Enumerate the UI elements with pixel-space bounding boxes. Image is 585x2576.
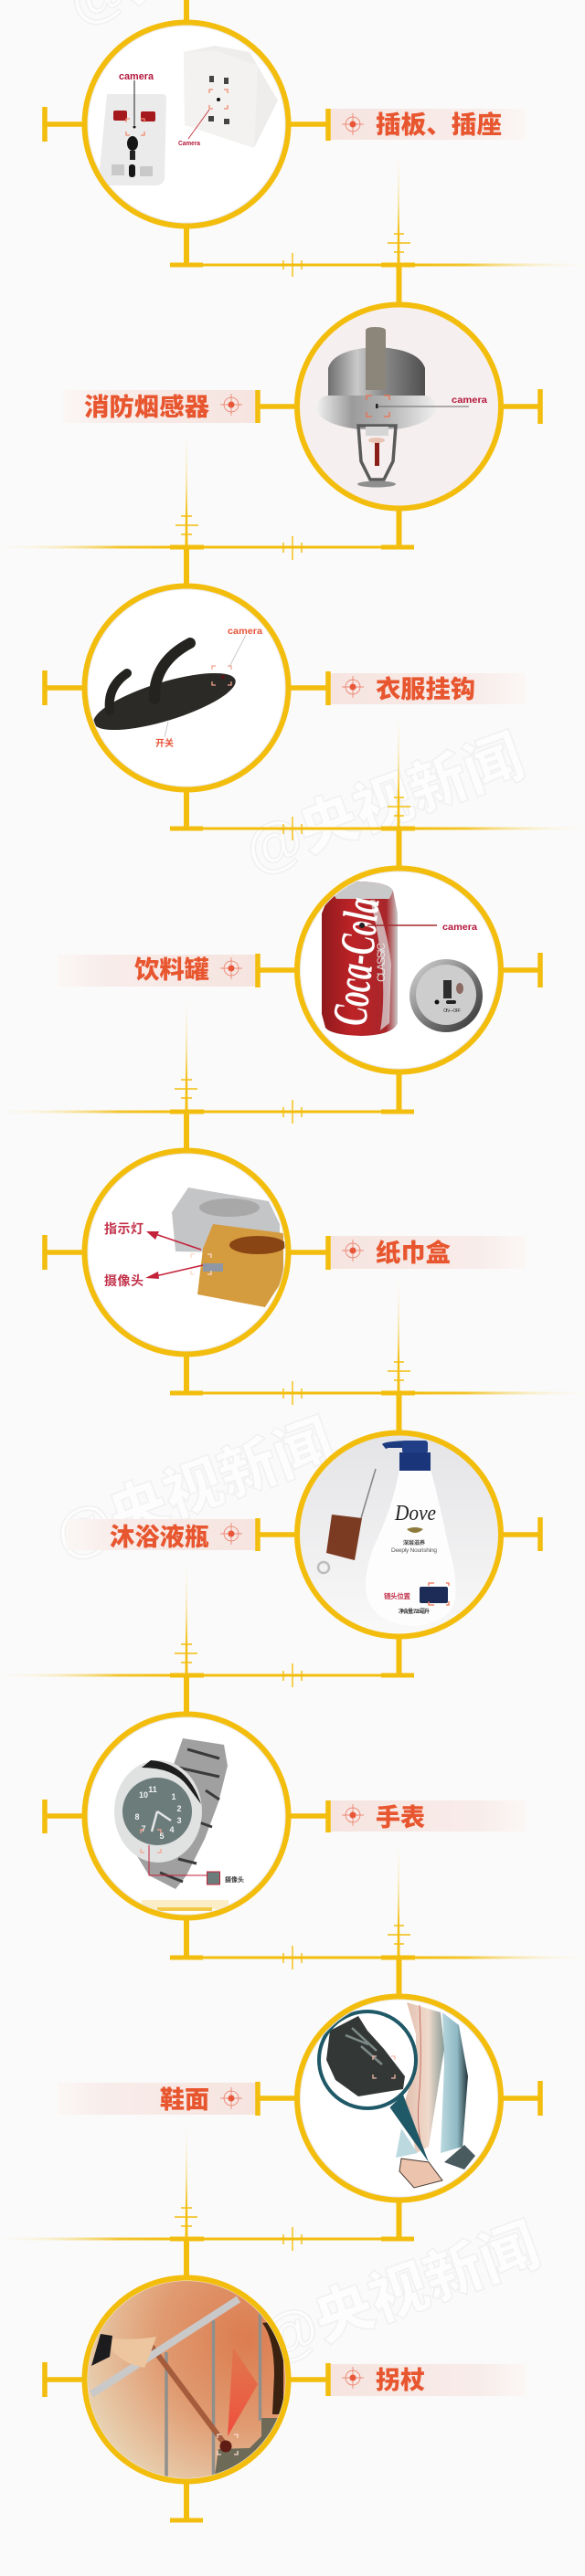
side ticks (45, 670, 328, 705)
photo: watch: 4 (169, 1825, 175, 1834)
heading: shoe: 鞋面 (160, 2086, 209, 2114)
photo: watch: 8 (134, 1812, 140, 1821)
ring (84, 1714, 289, 1918)
photo: tissue boxes (104, 1188, 285, 1307)
photo: watch (114, 1738, 244, 1911)
photo: watch: 10 (139, 1790, 148, 1800)
side ticks (45, 2362, 328, 2397)
item 8: shoe (58, 1997, 540, 2200)
photo: sprinkler detector: camera (452, 396, 487, 406)
heading: can: 饮料罐 (134, 956, 209, 984)
heading: bottle: 沐浴液瓶 (110, 1524, 209, 1551)
cane (149, 2343, 226, 2445)
heading: hook: 衣服挂钩 (376, 675, 475, 703)
photo: black hook (93, 628, 263, 747)
wall socket (178, 46, 278, 148)
photo: sprinkler detector (298, 306, 499, 507)
can bottom: ON—OFF (443, 1008, 461, 1014)
cylinder (328, 347, 425, 398)
item 2: smoke detector (63, 305, 540, 508)
item 6: shower gel bottle (67, 1432, 540, 1637)
magnifier handle (389, 2095, 429, 2162)
target icon (342, 676, 364, 698)
target icon (220, 394, 242, 416)
target icon (342, 1804, 364, 1826)
ring (297, 305, 501, 508)
label band: shoe (58, 2083, 258, 2115)
label band: walking stick (329, 2364, 526, 2396)
heading: socket: 插板、插座 (376, 111, 502, 139)
can body (322, 882, 398, 1036)
can body: Coca-Cola (322, 895, 390, 1028)
light beam (228, 2348, 258, 2436)
flange (315, 396, 437, 429)
label band: hook (329, 673, 526, 704)
photo: watch: 5 (159, 1832, 165, 1841)
label band: tissue box (329, 1236, 526, 1269)
photo: dove bottle and remote: 镜头位置 (384, 1591, 411, 1600)
ring (297, 868, 501, 1072)
photo: dove bottle and remote: Deeply Nourishing (391, 1547, 437, 1554)
magnifier lens (319, 2011, 416, 2108)
label band: watch (329, 1800, 526, 1832)
ring (84, 2278, 289, 2481)
item 1: socket (45, 22, 526, 227)
photo: black hook: 开关 (155, 737, 174, 749)
cuff (91, 2334, 112, 2366)
dial (122, 1778, 192, 1845)
watermark middle: @央视新闻 (46, 1409, 342, 1569)
balusters (165, 2312, 261, 2476)
pump (382, 1441, 431, 1471)
item 5: tissue box (45, 1151, 526, 1354)
sprinkler head (357, 426, 396, 488)
photo: watch: 11 (148, 1785, 157, 1794)
photo: legs and magnifier (317, 2002, 475, 2189)
hand (112, 2337, 156, 2368)
label band: bottle (67, 1519, 258, 1550)
bottle body (366, 1470, 455, 1599)
target icon (342, 1240, 364, 1262)
item 3: clothes hook (45, 586, 526, 789)
label band: can (58, 955, 258, 987)
target icon (342, 2367, 364, 2389)
can bottom (410, 959, 483, 1032)
vertical and horizontal tick groups (175, 234, 410, 2226)
ring (84, 22, 289, 227)
photo: watch: 2 (176, 1804, 182, 1813)
heading: watch: 手表 (376, 1804, 425, 1832)
photo: tissue boxes: 摄像头 (104, 1273, 144, 1288)
photo: plug and wall socket (100, 46, 278, 185)
photo: tissue boxes: 指示灯 (104, 1221, 144, 1236)
bar (366, 327, 386, 390)
photo: watch: 3 (176, 1816, 182, 1825)
heading: walking stick: 拐杖 (376, 2367, 425, 2394)
ring (297, 1997, 501, 2200)
side ticks (45, 1235, 328, 1270)
wall socket: Camera (178, 141, 200, 147)
item 9: walking stick (45, 2278, 526, 2481)
bezel (114, 1760, 202, 1863)
photo: black hook: camera (228, 627, 262, 637)
target icon (220, 957, 242, 979)
side ticks (45, 107, 328, 142)
photo: dove bottle and remote: 深层滋养 (403, 1539, 425, 1547)
side ticks (258, 1517, 540, 1551)
rail (91, 2299, 239, 2394)
item 7: watch (45, 1714, 526, 1918)
photo: watch: 7 (141, 1824, 146, 1833)
photo: dove bottle and remote: Dove (394, 1502, 436, 1526)
photo: watch: 摄像头 (225, 1875, 244, 1884)
label band: socket (329, 109, 526, 140)
power strip (99, 71, 166, 185)
remote (318, 1469, 376, 1573)
side ticks (258, 2081, 540, 2116)
target icon (220, 2087, 242, 2109)
side ticks (45, 1800, 328, 1833)
photo: dove bottle and remote: 净含量:720毫升 (399, 1608, 430, 1615)
ring (84, 1151, 289, 1354)
legs (396, 2002, 475, 2188)
photo: stick on stairs (86, 2279, 287, 2480)
target icon (220, 1523, 242, 1545)
label band: smoke detector (63, 390, 258, 423)
photo: dove bottle and remote (300, 1436, 498, 1614)
heading: smoke detector: 消防烟感器 (84, 393, 209, 421)
power strip: camera (119, 71, 154, 82)
side ticks (258, 389, 540, 424)
photo: coke can: camera (442, 923, 477, 933)
watermark upper: @央视新闻 (236, 723, 532, 884)
item 4: drink can (58, 868, 540, 1072)
can body: CLASSIC (375, 943, 388, 982)
side ticks (258, 953, 540, 987)
heading: tissue box: 纸巾盒 (376, 1239, 451, 1267)
strap (134, 1738, 228, 1889)
ring (297, 1432, 501, 1637)
target icon (342, 113, 364, 135)
photo: coke can (322, 882, 483, 1036)
steps (215, 2418, 278, 2474)
watermark lower: @央视新闻 (251, 2212, 548, 2373)
photo: watch: 1 (171, 1792, 176, 1801)
dark figure (262, 2320, 283, 2414)
ring (84, 586, 289, 789)
